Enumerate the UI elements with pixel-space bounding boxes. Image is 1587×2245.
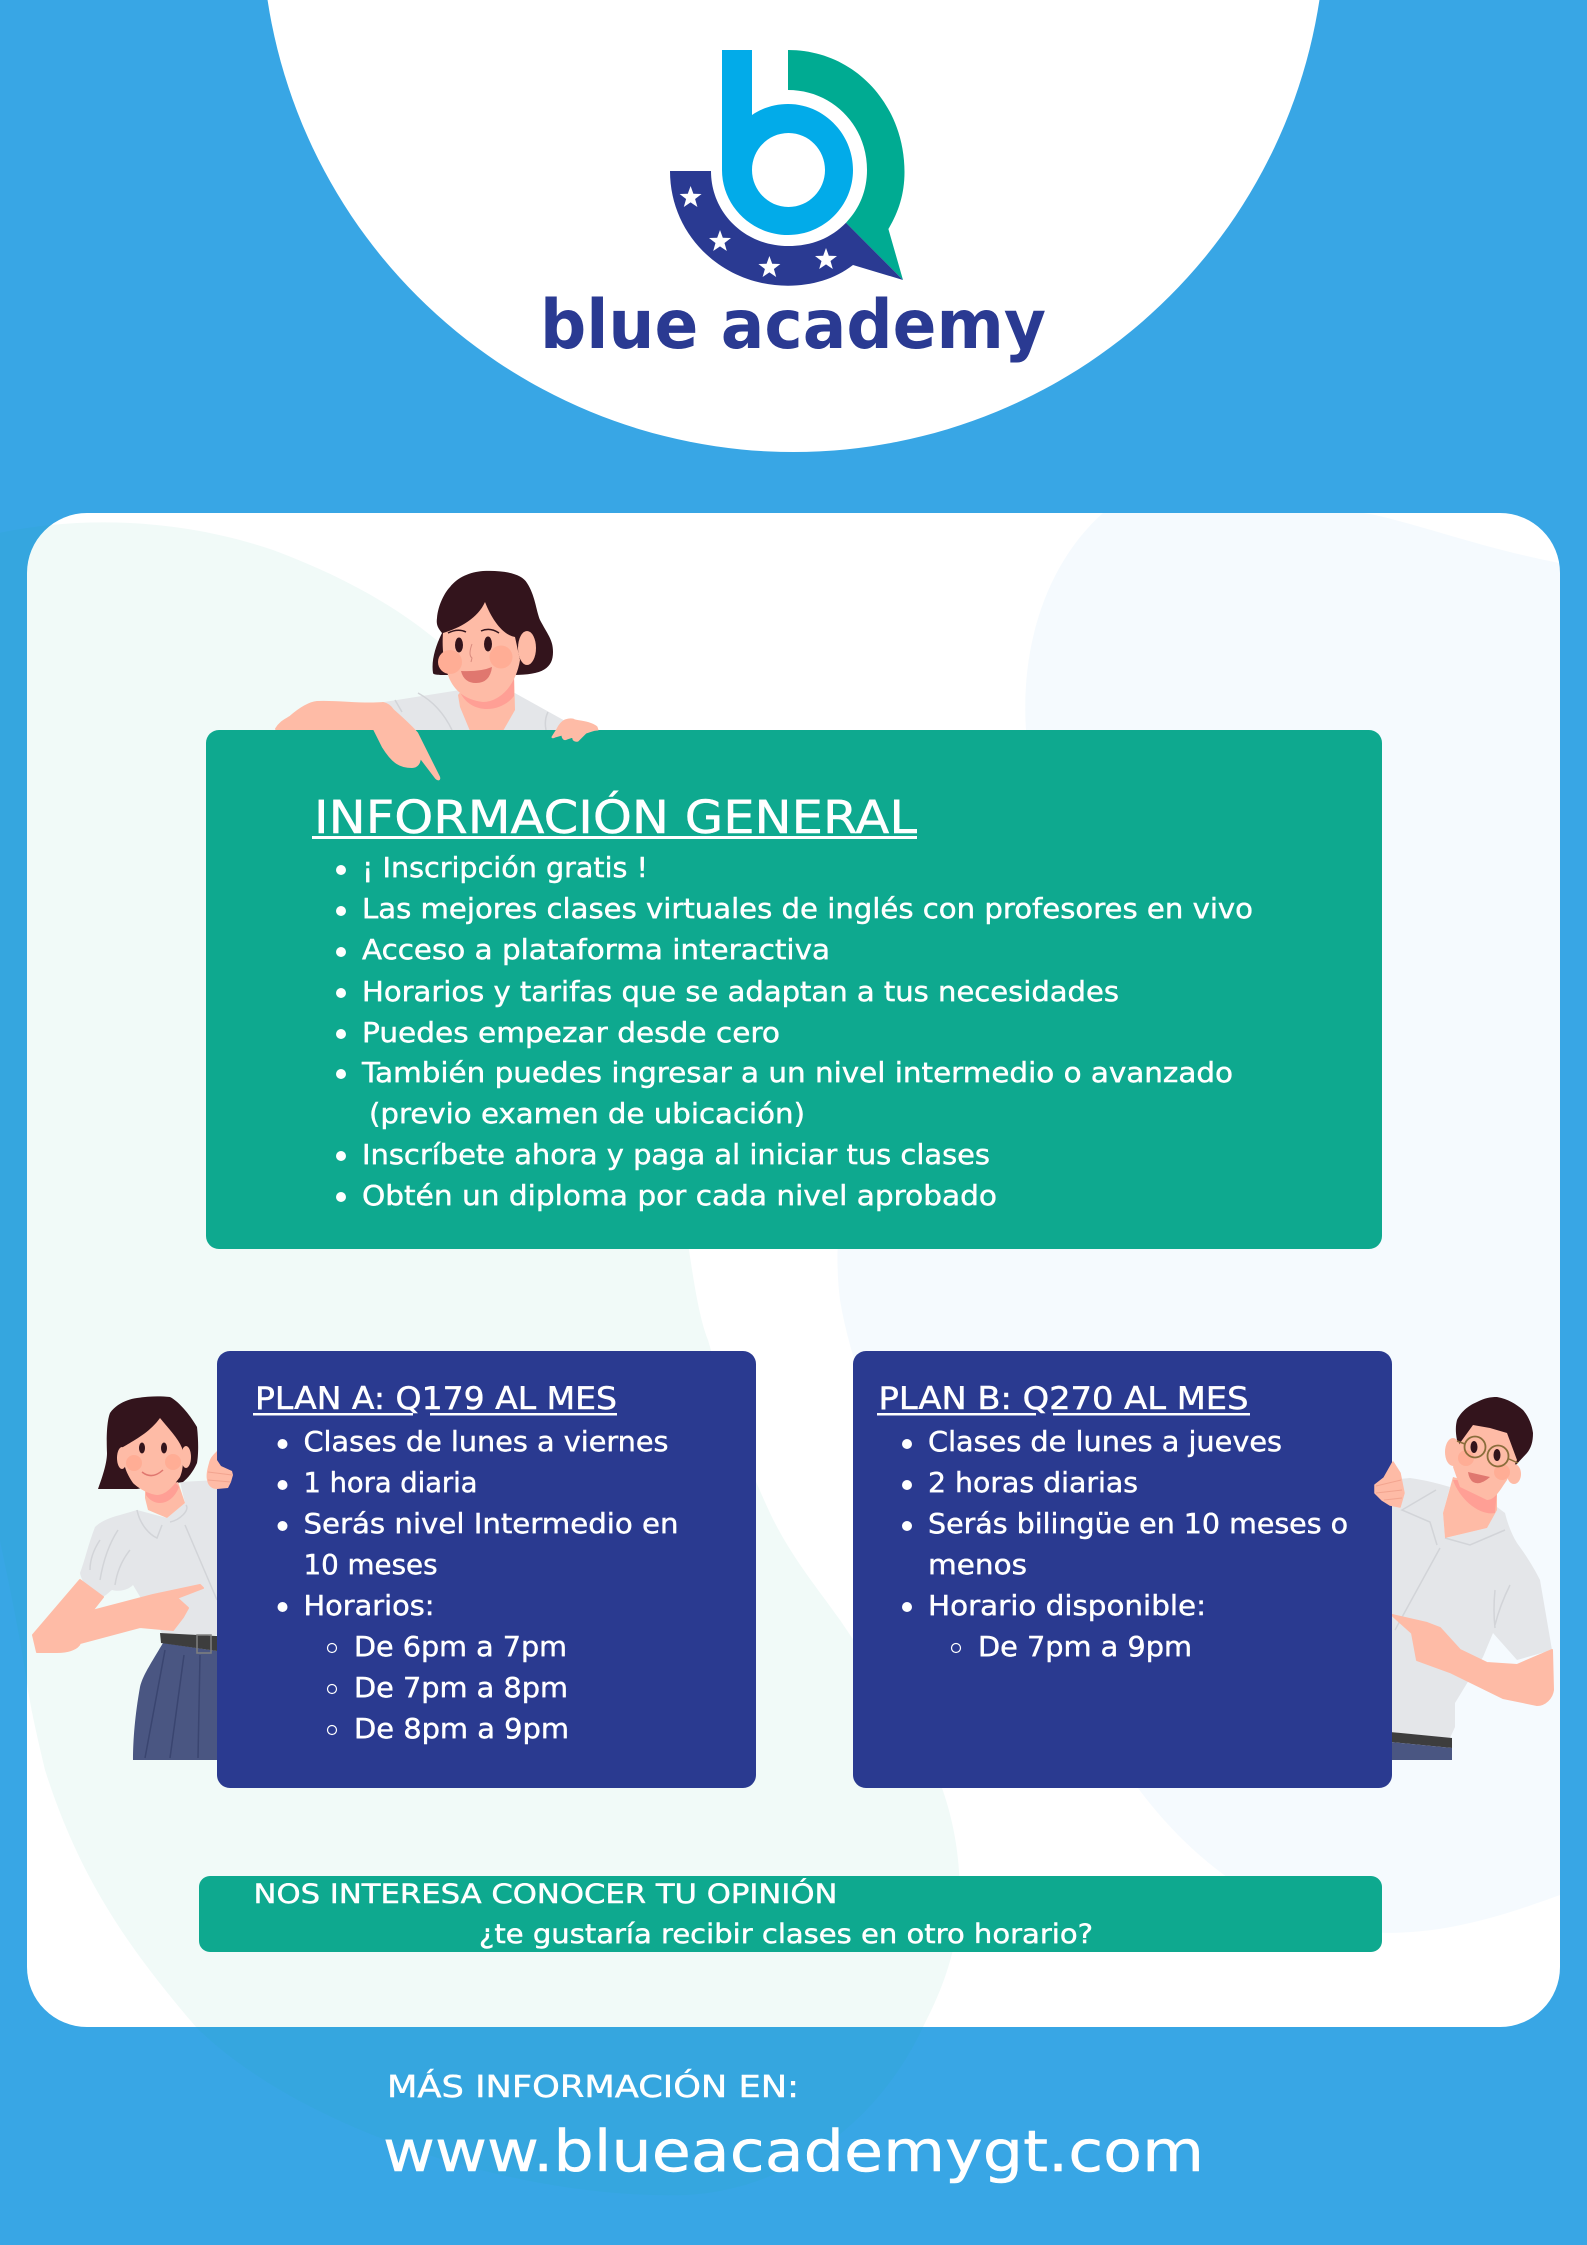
list: general information bullets: (previo examen de ubicación) (369, 1098, 805, 1130)
list: general information bullets (336, 852, 1253, 1212)
list: plan A details: 1 hora diaria (304, 1467, 478, 1499)
panel: general information (206, 730, 1382, 1249)
list: plan A details (278, 1426, 678, 1745)
list: plan A details: Horarios: (304, 1590, 434, 1622)
list: plan A details: Clases de lunes a viernes (304, 1426, 668, 1458)
icon: hand on plan A panel (207, 1451, 233, 1489)
panel: opinion callout (199, 1876, 1382, 1952)
icon: hand on plan B panel (1375, 1462, 1404, 1507)
list: general information bullets: ¡ Inscripción gratis ! (362, 852, 648, 884)
list: general information bullets: Puedes empezar desde cero (362, 1017, 780, 1049)
list: plan A details: De 8pm a 9pm (354, 1713, 569, 1745)
logo (540, 50, 1046, 365)
skirt (133, 1643, 217, 1760)
neck (458, 672, 515, 731)
shirt (80, 1480, 217, 1635)
illustration: woman behind general info panel (378, 571, 570, 735)
list: plan B details: Serás bilingüe en 10 meses o (928, 1508, 1348, 1540)
list: general information bullets: Horarios y tarifas que se adaptan a tus necesidades (362, 976, 1119, 1008)
heading: plan B: PLAN B: Q270 AL MES (878, 1381, 1248, 1417)
text: opinion heading: NOS INTERESA CONOCER TU OPINIÓN (254, 1878, 838, 1910)
right background blob (838, 499, 1587, 1933)
list: plan B details: menos (928, 1549, 1027, 1581)
neck (1443, 1477, 1497, 1538)
face (1445, 1438, 1461, 1466)
list: general information bullets: Obtén un diploma por cada nivel aprobado (362, 1180, 997, 1212)
logo wordmark: blue academy (540, 286, 1046, 365)
belt (1390, 1732, 1452, 1748)
arm (1392, 1615, 1553, 1705)
text: opinion question: ¿te gustaría recibir clases en otro horario? (479, 1919, 1093, 1950)
illustration: woman's arm and hand pointing down (276, 702, 598, 779)
panel: main white card (27, 513, 1560, 2027)
illustration: man pointing left at plan B (1390, 1397, 1553, 1760)
face (518, 631, 536, 665)
list: general information bullets: También puedes ingresar a un nivel intermedio o avanzado (361, 1057, 1233, 1089)
list: general information bullets: Acceso a plataforma interactiva (362, 934, 830, 966)
list: plan A details: De 6pm a 7pm (354, 1631, 567, 1663)
heading: general information: INFORMACIÓN GENERAL (314, 791, 917, 844)
shirt (378, 690, 570, 735)
panel: plan A (217, 1351, 756, 1788)
list: plan A details: Serás nivel Intermedio en (304, 1508, 678, 1540)
belt (160, 1633, 217, 1651)
list: plan B details: 2 horas diarias (928, 1467, 1138, 1499)
text: more information: MÁS INFORMACIÓN EN: (387, 2068, 799, 2105)
trousers (1390, 1742, 1452, 1760)
text: website: www.blueacademygt.com (383, 2119, 1204, 2185)
hair (433, 571, 553, 675)
hair (1456, 1397, 1533, 1468)
panel: plan B (853, 1351, 1392, 1788)
shirt (1390, 1478, 1552, 1738)
logo mark: blue letter b (722, 50, 853, 235)
list: plan B details: Horario disponible: (928, 1590, 1206, 1622)
logo mark: navy crescent (670, 171, 903, 286)
illustration: woman pointing right at plan A (33, 1396, 217, 1760)
hair back (98, 1396, 198, 1489)
face (117, 1447, 127, 1469)
list: plan B details: Clases de lunes a jueves (928, 1426, 1282, 1458)
logo stars (680, 186, 837, 277)
footer (383, 2068, 1204, 2185)
list: plan B details: De 7pm a 9pm (978, 1631, 1192, 1663)
logo mark: teal speech bubble (788, 50, 904, 280)
logo circle (262, 0, 1326, 452)
neck (145, 1482, 185, 1518)
list: general information bullets: Las mejores clases virtuales de inglés con profesores en vivo (362, 893, 1253, 925)
list: plan A details: 10 meses (304, 1549, 438, 1581)
left background blob (0, 522, 960, 2195)
list: general information bullets: Inscríbete ahora y paga al iniciar tus clases (362, 1139, 990, 1171)
list: plan B details (902, 1426, 1348, 1663)
heading: plan A: PLAN A: Q179 AL MES (255, 1381, 617, 1417)
arm (33, 1580, 203, 1652)
list: plan A details: De 7pm a 8pm (354, 1672, 568, 1704)
